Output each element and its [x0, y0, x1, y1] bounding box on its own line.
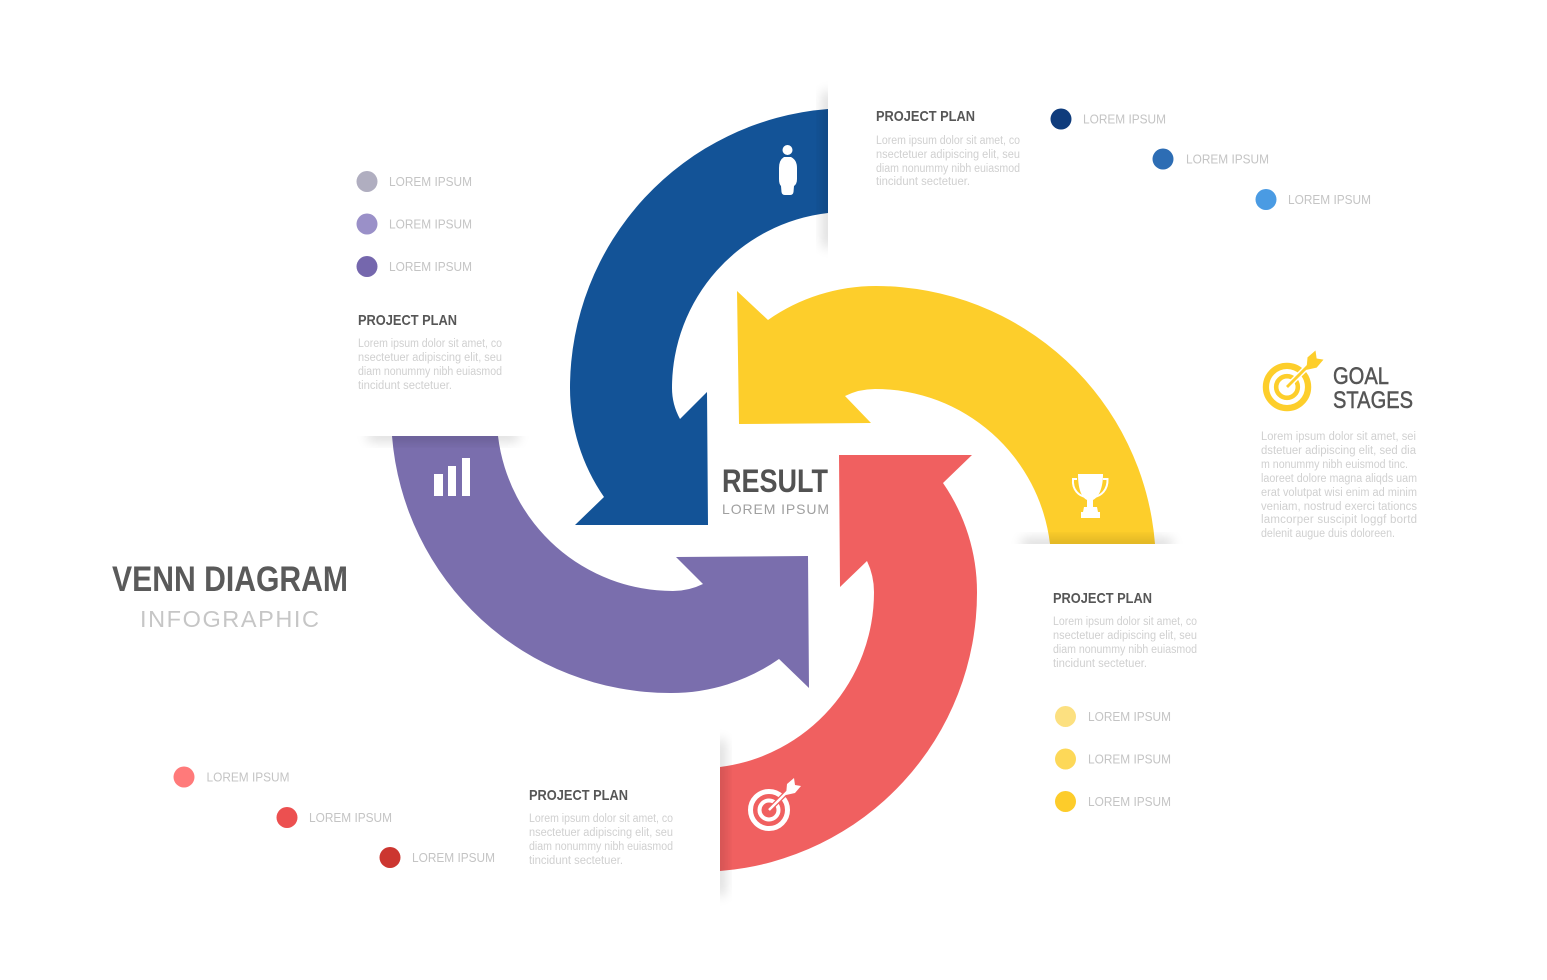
- purple arrow: [368, 432, 809, 693]
- panel: blue project plan: [876, 108, 1020, 188]
- panel: purple project plan: tincidunt sectetuer.: [358, 380, 452, 392]
- legend: yellow: LOREM IPSUM: [1088, 709, 1171, 724]
- panel: red project plan: Lorem ipsum dolor sit amet, co: [529, 813, 673, 825]
- legend: purple: LOREM IPSUM: [389, 216, 472, 232]
- panel: blue project plan: tincidunt sectetuer.: [876, 176, 970, 188]
- icon: person: [779, 145, 797, 195]
- panel: blue project plan: PROJECT PLAN: [876, 108, 975, 125]
- title: VENN DIAGRAM: [112, 559, 348, 599]
- legend: red: LOREM IPSUM: [206, 770, 290, 784]
- icon: bar chart: [434, 458, 470, 496]
- legend: red: [174, 766, 495, 868]
- legend: purple: LOREM IPSUM: [389, 259, 472, 274]
- legend: blue: LOREM IPSUM: [1083, 112, 1166, 126]
- goal stages text: [1261, 431, 1417, 540]
- panel: blue project plan: diam nonummy nibh euiasmod: [876, 163, 1020, 175]
- icon: target: [750, 778, 801, 828]
- goal stages text: Lorem ipsum dolor sit amet, sei: [1261, 431, 1416, 443]
- panel: yellow project plan: Lorem ipsum dolor sit amet, co: [1053, 616, 1197, 628]
- legend: purple: [356, 171, 472, 277]
- legend: red: LOREM IPSUM: [309, 810, 392, 825]
- panel: red project plan: PROJECT PLAN: [529, 787, 628, 804]
- panel: blue project plan: Lorem ipsum dolor sit amet, co: [876, 135, 1020, 147]
- goal stages heading: [1333, 363, 1413, 414]
- goal stages text: laoreet dolore magna aliqds uam: [1261, 473, 1417, 485]
- panel: purple project plan: Lorem ipsum dolor sit amet, co: [358, 338, 502, 350]
- goal stages heading: STAGES: [1333, 387, 1413, 414]
- panel: purple project plan: diam nonummy nibh euiasmod: [358, 366, 502, 378]
- goal stages text: veniam, nostrud exerci tationcs: [1261, 501, 1417, 513]
- legend: yellow: [1055, 706, 1171, 812]
- result label: RESULT: [722, 463, 828, 499]
- panel: red project plan: tincidunt sectetuer.: [529, 855, 623, 867]
- panel: purple project plan: [358, 312, 502, 392]
- legend: purple: LOREM IPSUM: [389, 174, 472, 189]
- goal stages text: delenit augue duis doloreen.: [1261, 528, 1395, 540]
- result label: [722, 463, 829, 517]
- legend: red: LOREM IPSUM: [412, 850, 495, 865]
- result label: LOREM IPSUM: [722, 501, 829, 517]
- panel: goal stages: [1261, 351, 1417, 540]
- legend: yellow: LOREM IPSUM: [1088, 752, 1171, 766]
- icon: goal target: [1266, 351, 1323, 408]
- panel: yellow project plan: diam nonummy nibh euiasmod: [1053, 644, 1197, 656]
- legend: blue: [1050, 108, 1371, 210]
- panel: blue project plan: nsectetuer adipiscing elit, seu: [876, 149, 1020, 161]
- panel: red project plan: diam nonummy nibh euiasmod: [529, 841, 673, 853]
- goal stages heading: GOAL: [1333, 363, 1389, 390]
- panel: purple project plan: nsectetuer adipiscing elit, seu: [358, 352, 502, 364]
- panel: red project plan: [529, 787, 673, 867]
- legend: blue: LOREM IPSUM: [1186, 152, 1269, 166]
- red arrow: [716, 455, 977, 895]
- panel: yellow project plan: PROJECT PLAN: [1053, 590, 1152, 607]
- goal stages text: m nonummy nibh euismod tinc.: [1261, 459, 1408, 471]
- title: INFOGRAPHIC: [140, 606, 319, 632]
- icon: trophy: [1073, 474, 1108, 518]
- goal stages text: dstetuer adipiscing elit, sed dia: [1261, 445, 1417, 457]
- yellow arrow: [737, 286, 1172, 548]
- goal stages text: lamcorper suscipit loggf bortd: [1261, 514, 1417, 526]
- legend: blue: LOREM IPSUM: [1288, 192, 1371, 207]
- panel: purple project plan: PROJECT PLAN: [358, 312, 457, 329]
- goal stages text: erat volutpat wisi enim ad minim: [1261, 487, 1417, 499]
- legend: yellow: LOREM IPSUM: [1088, 794, 1171, 809]
- panel: yellow project plan: [1053, 590, 1197, 670]
- blue arrow: [570, 92, 832, 525]
- panel: yellow project plan: nsectetuer adipiscing elit, seu: [1053, 630, 1197, 642]
- title: [112, 559, 348, 632]
- panel: yellow project plan: tincidunt sectetuer.: [1053, 658, 1147, 670]
- panel: red project plan: nsectetuer adipiscing elit, seu: [529, 827, 673, 839]
